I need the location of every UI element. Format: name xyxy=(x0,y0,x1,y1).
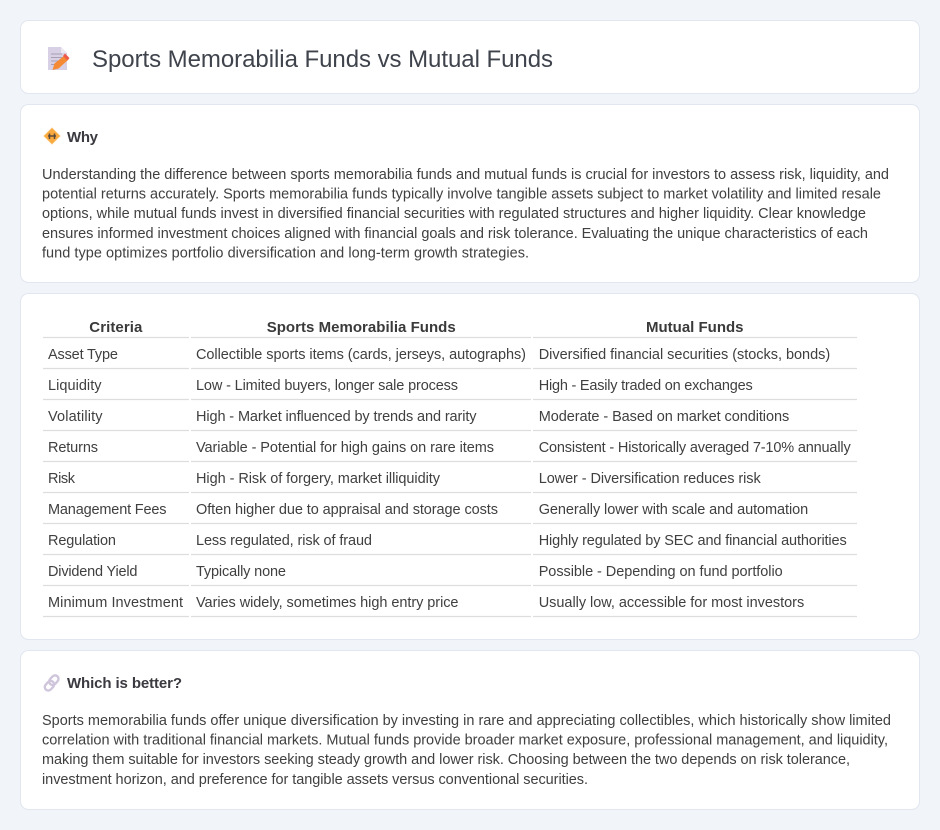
text block: which is better explanation xyxy=(42,713,891,788)
row: dividend yield: Possible - Depending on fund portfolio xyxy=(539,564,783,580)
row: regulation: Regulation xyxy=(48,533,116,549)
row: returns: Returns xyxy=(48,440,98,456)
row: management fees: Generally lower with scale and automation xyxy=(539,502,808,518)
row: minimum investment: Usually low, accessible for most investors xyxy=(539,595,804,611)
text block: which is better explanation: investment horizon, and preference for tangible assets versus conventional securities. xyxy=(42,772,588,788)
row: asset type xyxy=(48,347,830,363)
row: dividend yield: Dividend Yield xyxy=(48,564,138,580)
text block: why explanation: fund type optimizes portfolio diversification and long-term growth strategies. xyxy=(42,245,529,261)
row: liquidity: Liquidity xyxy=(48,378,102,394)
table header: Criteria xyxy=(89,319,143,336)
text block: why explanation: Understanding the difference between sports memorabilia funds and mutual funds is crucial for investors to assess risk, liquidity, and xyxy=(42,167,889,183)
text block: which is better explanation: Sports memorabilia funds offer unique diversification by investing in rare and appreciating collectibles, which historically show limited xyxy=(42,713,891,729)
text block: why explanation xyxy=(42,167,889,261)
row: liquidity: High - Easily traded on exchanges xyxy=(539,378,753,394)
panel: title card xyxy=(20,20,920,94)
row: management fees: Management Fees xyxy=(48,502,166,518)
row: risk: Lower - Diversification reduces risk xyxy=(539,471,761,487)
icon: warning diamond xyxy=(44,128,60,144)
icon: chain link xyxy=(43,674,60,692)
row: risk: High - Risk of forgery, market illiquidity xyxy=(196,471,441,487)
row: returns xyxy=(48,440,851,456)
row: minimum investment: Minimum Investment xyxy=(48,595,183,611)
title: Sports Memorabilia Funds vs Mutual Funds xyxy=(92,46,553,73)
row: volatility: High - Market influenced by trends and rarity xyxy=(196,409,477,425)
row: volatility: Moderate - Based on market conditions xyxy=(539,409,789,425)
table header xyxy=(89,319,744,336)
text block: which is better explanation: making them suitable for investors seeking steady growth and lower risk. Choosing between the two depends on risk tolerance, xyxy=(42,752,850,768)
row: regulation xyxy=(48,533,847,549)
row: volatility: Volatility xyxy=(48,409,103,425)
row: dividend yield xyxy=(48,564,783,580)
row: risk: Risk xyxy=(48,471,76,487)
row: management fees xyxy=(48,502,808,518)
table header: Sports Memorabilia Funds xyxy=(267,319,456,336)
row: risk xyxy=(48,471,761,487)
row: volatility xyxy=(48,409,789,425)
panel: which is better xyxy=(20,650,920,810)
row: asset type: Asset Type xyxy=(48,347,118,363)
text block: why explanation: options, while mutual funds invest in diversified financial securities with regulated structures and higher liquidity. Clear knowledge xyxy=(42,206,866,222)
row: liquidity xyxy=(48,378,753,394)
panel: why xyxy=(20,104,920,282)
row: asset type: Diversified financial securities (stocks, bonds) xyxy=(539,347,830,363)
heading: why: Why xyxy=(67,129,99,146)
text block: why explanation: ensures informed investment choices aligned with financial goals and risk tolerance. Evaluating the unique characteristics of each xyxy=(42,226,868,242)
row: liquidity: Low - Limited buyers, longer sale process xyxy=(196,378,458,394)
icon: document with pencil xyxy=(48,47,70,70)
row: minimum investment xyxy=(48,595,804,611)
row: regulation: Highly regulated by SEC and financial authorities xyxy=(539,533,847,549)
row: dividend yield: Typically none xyxy=(196,564,286,580)
row: returns: Variable - Potential for high gains on rare items xyxy=(196,440,494,456)
row: returns: Consistent - Historically averaged 7-10% annually xyxy=(539,440,851,456)
row: regulation: Less regulated, risk of fraud xyxy=(196,533,372,549)
heading: which is better: Which is better? xyxy=(67,675,182,692)
text block: which is better explanation: correlation with traditional financial markets. Mutual funds provide broader market exposure, professional management, and liquidity, xyxy=(42,733,888,749)
text block: why explanation: potential returns accurately. Sports memorabilia funds typically involve tangible assets subject to market volatility and limited resale xyxy=(42,187,881,203)
row: asset type: Collectible sports items (cards, jerseys, autographs) xyxy=(196,347,526,363)
row: minimum investment: Varies widely, sometimes high entry price xyxy=(196,595,458,611)
table header: Mutual Funds xyxy=(646,319,744,336)
row: management fees: Often higher due to appraisal and storage costs xyxy=(196,502,498,518)
panel: comparison table xyxy=(20,294,920,640)
